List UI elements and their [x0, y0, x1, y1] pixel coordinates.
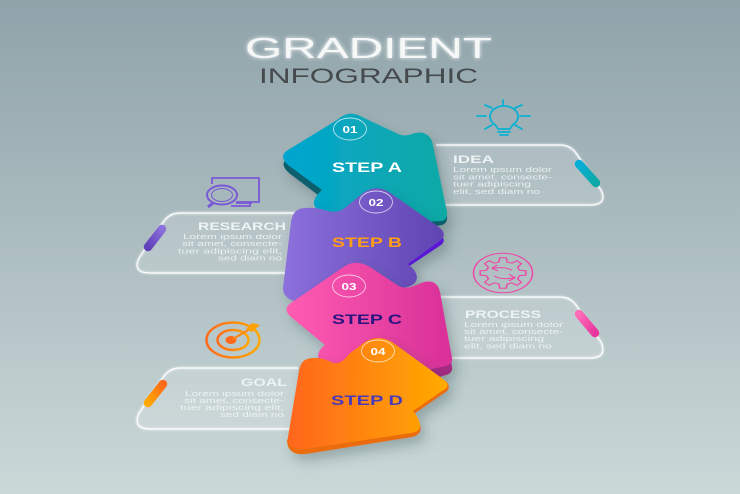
- panel: process: [440, 253, 603, 358]
- body text: tuer adipiscing: [464, 336, 544, 343]
- body text: sed diam no: [218, 256, 282, 262]
- step d arrow: [287, 338, 449, 454]
- number badge: [360, 191, 392, 213]
- step c arrow: [286, 263, 452, 389]
- step label: STEP C: [332, 311, 402, 327]
- number badge: 02: [368, 198, 384, 209]
- step label: STEP B: [332, 234, 402, 250]
- arrow face: [283, 188, 444, 310]
- body text: [464, 322, 564, 350]
- heading: IDEA: [453, 154, 494, 166]
- step label: STEP D: [331, 392, 403, 408]
- number badge: 01: [342, 125, 358, 136]
- heading: PROCESS: [465, 309, 541, 321]
- number badge: 04: [370, 347, 386, 358]
- body text: tuer adipiscing: [453, 182, 531, 188]
- heading: infographic: INFOGRAPHIC: [259, 65, 478, 88]
- number badge: [332, 275, 366, 297]
- number badge: 03: [342, 282, 357, 293]
- body text: Lorem ipsum dolor: [183, 234, 283, 241]
- body text: sed diam no: [220, 412, 284, 419]
- arrow side: [360, 290, 452, 389]
- number badge: [334, 118, 366, 140]
- body text: sit amet, consecte-: [184, 398, 285, 405]
- arrow side: [287, 380, 449, 454]
- pill accent: [579, 164, 596, 183]
- body text: [180, 391, 285, 419]
- panel outline: [137, 368, 298, 429]
- arrow face: [283, 114, 447, 225]
- step b arrow: [283, 188, 444, 310]
- body text: sit amet, consecte-: [453, 174, 553, 182]
- panel outline: [436, 145, 603, 205]
- title: [245, 33, 492, 88]
- body text: [178, 234, 283, 262]
- panel: goal: [137, 322, 298, 429]
- heading: gradient: GRADIENT: [245, 33, 492, 65]
- body text: sit amet, consecte-: [464, 329, 564, 336]
- arrow side: [330, 193, 444, 295]
- arrow side: [284, 122, 447, 238]
- body text: tuer adipiscing elit,: [178, 248, 282, 256]
- arrow face: [288, 338, 448, 449]
- body text: tuer adipiscing elit,: [180, 405, 284, 412]
- icon: light bulb: [477, 100, 530, 135]
- icon: monitor and magnifier: [207, 178, 259, 207]
- body text: sit amet, consecte-: [182, 241, 283, 248]
- body text: [453, 167, 553, 196]
- body text: Lorem ipsum dolor: [453, 167, 553, 174]
- panel: research: [137, 178, 300, 273]
- icon: gear with arrows: [474, 253, 532, 293]
- step a arrow: [283, 114, 447, 238]
- body text: elit, sed diam no: [453, 189, 540, 196]
- heading: RESEARCH: [198, 221, 286, 233]
- step label: STEP A: [332, 159, 402, 175]
- number badge: [362, 340, 394, 362]
- panel outline: [137, 213, 300, 273]
- body text: Lorem ipsum dolor: [185, 391, 285, 398]
- panel outline: [440, 297, 603, 358]
- body text: Lorem ipsum dolor: [464, 322, 564, 329]
- panel: idea: [436, 100, 603, 205]
- pill accent: [148, 229, 162, 247]
- body text: elit, sed diam no: [464, 344, 552, 350]
- arrow face: [286, 263, 452, 378]
- icon: target: [206, 322, 260, 358]
- pill accent: [579, 314, 595, 333]
- heading: GOAL: [241, 377, 287, 389]
- pill accent: [148, 384, 163, 403]
